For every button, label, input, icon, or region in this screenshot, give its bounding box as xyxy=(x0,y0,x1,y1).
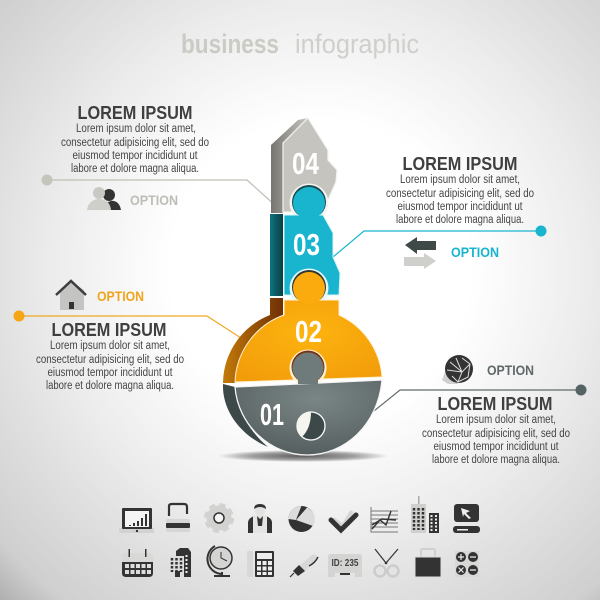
icon: people xyxy=(87,187,121,210)
leader line 02 xyxy=(14,310,244,340)
text block 02: consectetur adipisicing elit, sed do xyxy=(36,354,184,366)
text block 02: LOREM IPSUM xyxy=(52,320,166,340)
leader line 04 xyxy=(42,174,277,207)
title: business xyxy=(181,29,279,59)
option label 03: OPTION xyxy=(451,244,499,260)
piece 04 xyxy=(271,118,337,222)
text block 03: consectetur adipisicing elit, sed do xyxy=(386,188,534,200)
text block 04: eiusmod tempor incididunt ut xyxy=(72,150,198,162)
text block 01: consectetur adipisicing elit, sed do xyxy=(422,428,570,440)
title: infographic xyxy=(295,29,419,59)
piece 02 xyxy=(223,272,382,386)
piece 01 xyxy=(223,352,382,455)
option label 01: OPTION xyxy=(487,362,534,378)
icon row 2 xyxy=(122,546,479,577)
icon: globe clock xyxy=(207,546,232,577)
text block 04 xyxy=(61,103,209,175)
text block 03: LOREM IPSUM xyxy=(402,154,518,174)
text block 03: eiusmod tempor incididunt ut xyxy=(398,201,523,213)
icon: pie chart xyxy=(288,506,315,532)
text block 01 xyxy=(422,394,570,466)
icon: brain globe xyxy=(442,355,473,384)
icon: arrows xyxy=(404,237,436,269)
text block 04: labore et dolore magna aliqua. xyxy=(71,163,199,175)
leader line 01 xyxy=(374,384,586,411)
icon: line chart xyxy=(371,507,398,532)
number 02: 02 xyxy=(295,314,322,349)
icon: calendar xyxy=(122,549,153,577)
number 04: 04 xyxy=(292,146,320,181)
text block 02: labore et dolore magna aliqua. xyxy=(46,380,174,392)
leader line 03 xyxy=(333,226,546,257)
number 01: 01 xyxy=(260,397,284,432)
ground shadow xyxy=(218,450,388,462)
text block 04: consectetur adipisicing elit, sed do xyxy=(61,137,209,149)
text block 02: eiusmod tempor incididunt ut xyxy=(48,367,173,379)
text block 04: LOREM IPSUM xyxy=(78,103,192,123)
icon: monitor xyxy=(119,508,154,533)
icon: check xyxy=(331,511,356,530)
icon: gear xyxy=(206,505,232,531)
icon: buildings xyxy=(411,496,439,533)
icon: scissors xyxy=(374,549,398,576)
text block 01: Lorem ipsum dolor sit amet, xyxy=(436,414,556,426)
number 03: 03 xyxy=(293,227,320,262)
piece 03 xyxy=(270,187,340,308)
icon: office building xyxy=(170,548,191,577)
key graphic xyxy=(223,118,382,455)
icon: house xyxy=(56,281,86,310)
keyhole xyxy=(297,412,325,440)
text block 03 xyxy=(386,154,534,226)
icon: computer xyxy=(453,504,480,533)
text block 03: Lorem ipsum dolor sit amet, xyxy=(400,174,520,186)
icon: lock xyxy=(166,504,190,532)
icon: ID badge xyxy=(328,554,362,577)
icon row 1 xyxy=(119,496,480,533)
text block 04: Lorem ipsum dolor sit amet, xyxy=(76,123,196,135)
icon: ID badge: ID: 235 xyxy=(332,558,359,569)
text block 02: Lorem ipsum dolor sit amet, xyxy=(50,340,170,352)
text block 01: labore et dolore magna aliqua. xyxy=(432,454,560,466)
text block 03: labore et dolore magna aliqua. xyxy=(396,214,524,226)
text block 01: eiusmod tempor incididunt ut xyxy=(434,441,559,453)
icon: calculator xyxy=(247,551,274,577)
icon: math symbols xyxy=(455,551,479,577)
icon: businessman xyxy=(248,504,272,533)
option label 04: OPTION xyxy=(130,192,178,208)
text block 01: LOREM IPSUM xyxy=(438,394,552,414)
text block 02 xyxy=(36,320,184,392)
icon: briefcase xyxy=(415,549,441,577)
option label 02: OPTION xyxy=(97,288,144,304)
icon: pen xyxy=(290,554,318,577)
title xyxy=(181,29,419,59)
